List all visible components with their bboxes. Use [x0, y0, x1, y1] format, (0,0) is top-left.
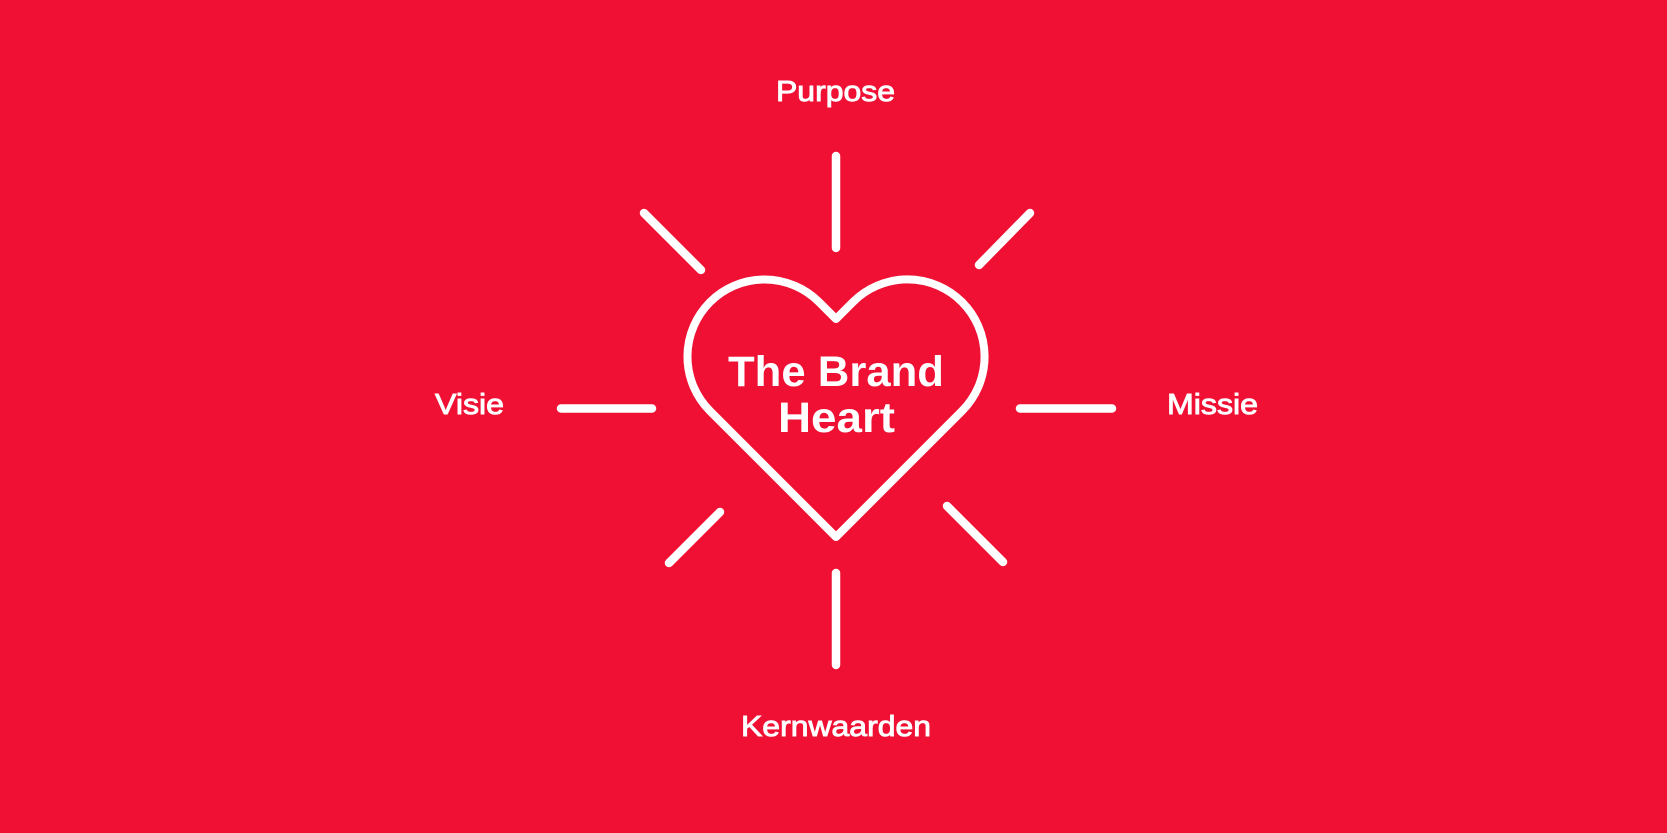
label: Kernwaarden: Kernwaarden: [741, 711, 931, 743]
title: The Brand Heart: The Brand: [728, 348, 944, 396]
label: Missie: Missie: [1167, 389, 1258, 421]
icon: heart outline: [687, 279, 985, 537]
rays around the heart: [561, 156, 1112, 665]
label: Purpose: Purpose: [776, 76, 895, 108]
title: The Brand Heart: [728, 348, 944, 442]
label: Visie: Visie: [435, 389, 504, 421]
title: The Brand Heart: Heart: [778, 394, 895, 442]
